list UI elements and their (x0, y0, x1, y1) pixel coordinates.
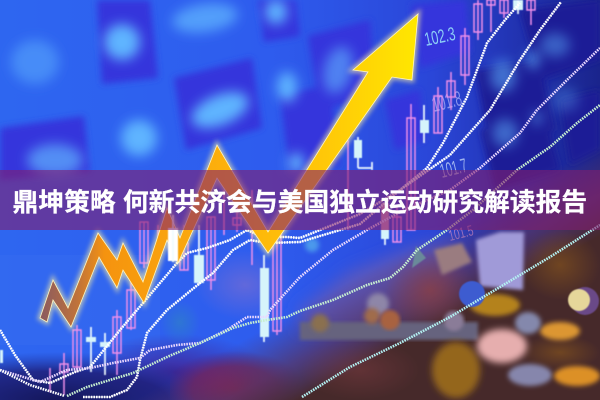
chart axis numbers: 101.7 (438, 155, 469, 183)
bottom-left colour wash (0, 250, 300, 400)
bokeh lights (300, 232, 600, 398)
violet mid-ground panel (300, 240, 460, 330)
title: 鼎坤策略 何新共济会与美国独立运动研究解读报告 (12, 188, 587, 217)
dark dashboard panels (0, 0, 600, 190)
white candle over arrow (168, 215, 178, 262)
title band (0, 170, 600, 230)
chart axis numbers: 101.5 (447, 222, 475, 245)
chart axis numbers: 102.3 (423, 24, 457, 51)
blurred background markers (11, 0, 579, 176)
rising arrow (40, 14, 418, 327)
warm background glow (300, 230, 600, 400)
chart axis numbers (423, 24, 475, 245)
chart axis numbers: 101.8 (430, 87, 464, 117)
